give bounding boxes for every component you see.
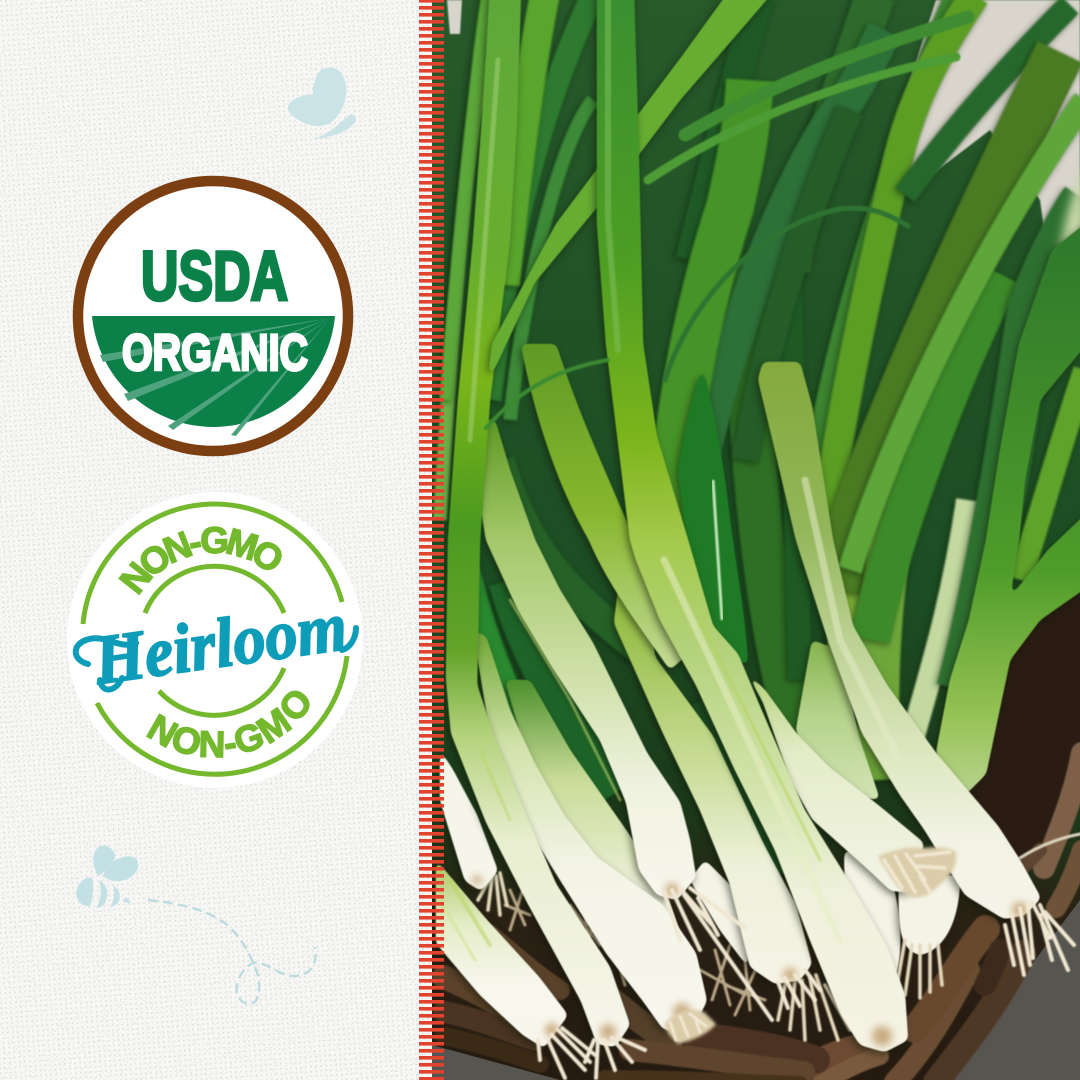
scallion 7 bottom left	[436, 860, 568, 1048]
NON-GMO bottom text: NON-GMO	[141, 681, 321, 765]
icon: bee	[76, 846, 138, 908]
scallion 3 left long	[446, 0, 630, 1047]
decorative stitched stripe	[419, 0, 444, 1080]
tuft: crumpled mid right detail	[884, 852, 950, 892]
tuft: bottom left bulb	[538, 1028, 595, 1078]
root tufts front	[538, 834, 1080, 1078]
scallion 9 right large	[758, 362, 1041, 919]
crumpled root masses	[664, 847, 956, 1044]
NON-GMO top text: NON-GMO	[112, 520, 291, 601]
tuft: second left bulb	[664, 888, 772, 1020]
pale stem behind left bulbs	[502, 678, 680, 930]
badge: USDA Organic	[78, 181, 348, 451]
scallion 1 central	[597, 0, 908, 1052]
bright diagonal leaf	[488, 0, 775, 379]
green field	[92, 316, 335, 427]
scallion 4 second left	[470, 420, 696, 900]
ORGANIC wordmark: ORGANIC	[122, 324, 308, 381]
field rays	[100, 318, 330, 436]
blurred pale leaf top right	[1060, 165, 1080, 260]
bulb base tan marks	[472, 875, 1028, 1046]
tabletop grey	[432, 900, 1080, 1080]
white bulbs behind	[690, 850, 960, 978]
glossy green leaf	[678, 368, 748, 665]
tuft: long white bulb detail	[670, 1014, 706, 1040]
root mass behind bulbs	[505, 890, 765, 1015]
thin arching leaves	[486, 17, 968, 428]
woven basket strands	[444, 753, 1080, 1080]
image: scallions in basket	[432, 0, 1080, 1080]
scallion 10 mid right	[745, 670, 924, 892]
beige table patches	[446, 0, 1080, 225]
badge: Heirloom Non-GMO	[67, 492, 363, 788]
fold stem	[521, 344, 692, 670]
icon: butterfly	[288, 68, 356, 139]
stem highlights	[440, 0, 900, 960]
right green stems	[936, 220, 1080, 795]
Heirloom script: Heirloom	[89, 588, 352, 700]
background leaves	[440, 0, 1080, 870]
photo backdrop	[432, 0, 1080, 1080]
basket interior shadow	[969, 592, 1080, 857]
tuft: left long bulb	[585, 1038, 645, 1078]
icon: bee flight trail	[148, 900, 316, 1004]
panel: linen background	[0, 0, 432, 1080]
pale stem centre right	[796, 640, 880, 800]
scallion 8 small left	[440, 750, 498, 891]
scallion 5 centre-left	[614, 575, 812, 984]
scallion 6 long white	[470, 630, 707, 1033]
USDA wordmark: USDA	[141, 237, 288, 315]
tuft: right bulb	[1005, 902, 1074, 975]
ring arcs	[83, 504, 347, 774]
root tufts back	[478, 873, 942, 1040]
tuft: centre-left bulb	[778, 970, 820, 1008]
